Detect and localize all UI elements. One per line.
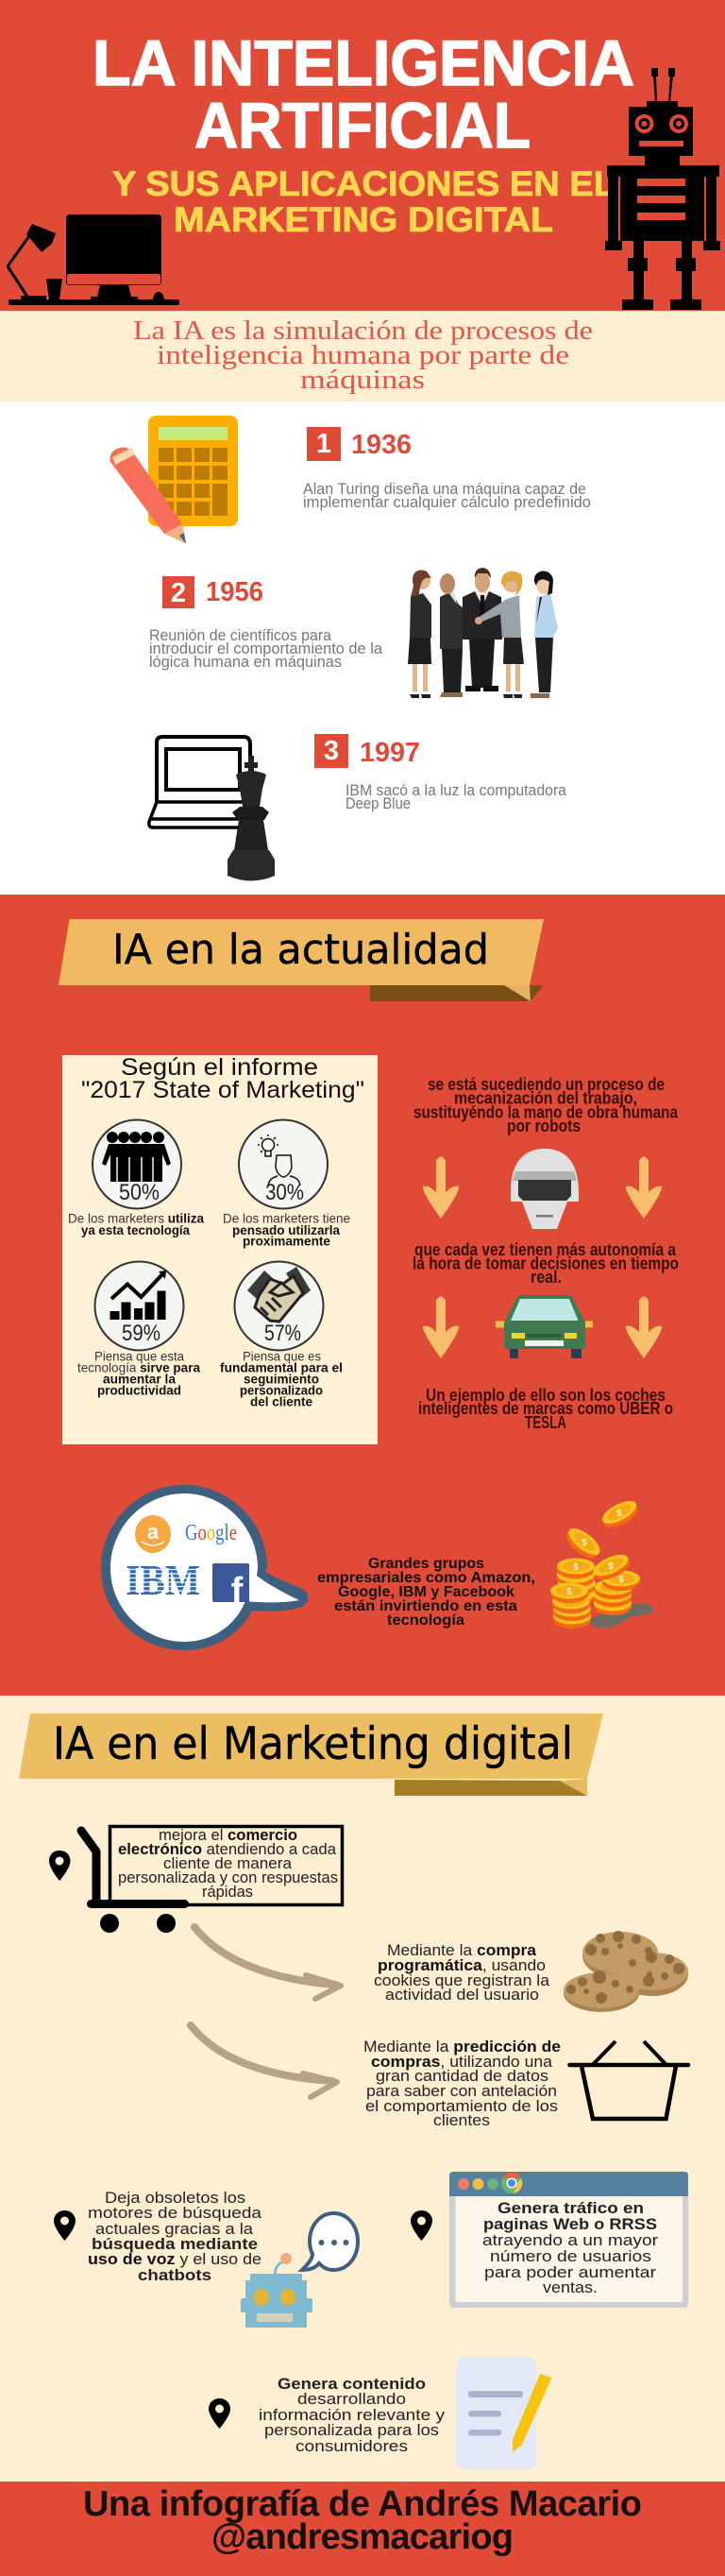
text: genera contenido: consumidores <box>295 2437 408 2455</box>
caption: 30% <box>223 1211 350 1249</box>
icon: gold coins: $ <box>573 1562 579 1573</box>
caption: 57%: personalizado <box>240 1383 323 1398</box>
text: tráfico: Genera tráfico en <box>497 2199 644 2217</box>
definition panel: inteligencia humana por parte de <box>157 341 569 370</box>
stat: 57% <box>234 1262 323 1351</box>
text: búsqueda por voz <box>88 2189 262 2284</box>
arrow: curved to basket <box>191 2025 337 2097</box>
text: predicción de compras: compras, utilizando una <box>371 2053 553 2071</box>
text: búsqueda por voz: búsqueda mediante <box>92 2235 258 2253</box>
caption: 50%: ya esta tecnología <box>81 1222 190 1237</box>
icon: location pin 2 <box>54 2210 76 2241</box>
icon: chatbot robot <box>241 2253 312 2328</box>
icon: chat bubble <box>302 2213 358 2270</box>
text: grandes grupos: Grandes grupos <box>368 1556 484 1572</box>
step 1 <box>303 427 591 511</box>
caption: 59%: aumentar la <box>103 1372 176 1387</box>
icon: gold coins: $ <box>616 1509 622 1519</box>
definition panel <box>0 311 725 401</box>
text: tráfico: ventas. <box>543 2278 598 2296</box>
text: búsqueda por voz: motores de búsqueda <box>88 2204 262 2222</box>
panel: State of Marketing report <box>62 1054 378 1444</box>
icon: laptop and chess king <box>149 737 275 880</box>
text: predicción de compras: el comportamiento de los <box>365 2097 558 2115</box>
icon: shopping basket <box>570 2041 688 2119</box>
stat: 50% <box>93 1120 181 1209</box>
browser window <box>449 2172 688 2308</box>
text: grandes grupos: Google, IBM y Facebook <box>338 1584 514 1600</box>
panel: IA en el Marketing digital <box>0 1696 725 2482</box>
text: mecanización: mecanización del trabajo, <box>454 1088 637 1107</box>
caption: 59%: tecnología sirve para <box>77 1360 200 1375</box>
text: coches inteligentes: TESLA <box>525 1413 566 1432</box>
speech bubble with company logos <box>101 1485 308 1650</box>
text: compra programática: Mediante la compra <box>387 1941 537 1959</box>
step 1: implementar cualquier cálculo predefinido <box>303 493 591 511</box>
text: coches inteligentes <box>418 1386 673 1432</box>
footer: Una infografía de Andrés Macario <box>83 2484 642 2524</box>
panel: IA en la actualidad <box>0 895 725 1696</box>
text: predicción de compras: Mediante la predicción de <box>363 2038 561 2056</box>
text: comercio electrónico: cliente de manera <box>163 1854 293 1872</box>
icon: gold coins: $ <box>608 1561 614 1572</box>
logo: Amazon <box>135 1515 171 1553</box>
text: compra programática: programática, usando <box>378 1956 546 1974</box>
text: genera contenido: personalizada para los <box>264 2421 439 2439</box>
text: grandes grupos: tecnología <box>387 1612 464 1629</box>
text: mecanización: sustituyéndo la mano de obra humana <box>413 1103 679 1122</box>
icon: cookies <box>564 1931 688 2012</box>
text: búsqueda por voz: actuales gracias a la <box>95 2220 254 2238</box>
text: mecanización: se está sucediendo un proceso de <box>428 1075 665 1094</box>
text: grandes grupos <box>317 1556 535 1629</box>
title: ARTIFICIAL <box>194 90 531 162</box>
footer: @andresmacariog <box>211 2517 514 2557</box>
arrow: down right 2 <box>626 1296 662 1358</box>
step 1: 1936 <box>351 430 412 460</box>
caption: 50%: De los marketers utiliza <box>68 1211 204 1226</box>
stat: 50%: 50% <box>119 1180 160 1205</box>
text: comercio electrónico: electrónico atendiendo a cada <box>118 1840 337 1858</box>
stat: 59%: 59% <box>122 1321 160 1346</box>
stat: 59% <box>94 1262 183 1351</box>
icon: shopping cart with text <box>81 1826 342 1933</box>
report heading <box>81 1054 364 1103</box>
step 1: Alan Turing diseña una máquina capaz de <box>303 480 586 498</box>
text: predicción de compras <box>363 2038 561 2129</box>
text: autonomía: real. <box>531 1268 562 1287</box>
text: autonomía: la hora de tomar decisiones en tiempo <box>413 1254 679 1273</box>
text: comercio electrónico: mejora el comercio <box>159 1826 297 1844</box>
title <box>93 27 634 162</box>
text: búsqueda por voz: chatbots <box>138 2266 211 2284</box>
report heading: "2017 State of Marketing" <box>81 1077 364 1103</box>
icon: gold coins <box>550 1496 653 1629</box>
step 2: 1956 <box>206 577 263 607</box>
text: mecanización: por robots <box>507 1117 581 1135</box>
definition panel: La IA es la simulación de procesos de <box>133 316 593 346</box>
text: comercio electrónico: rápidas <box>202 1883 253 1901</box>
icon: gold coins: $ <box>566 1587 572 1597</box>
footer <box>0 2482 725 2576</box>
logo: Google: Google <box>185 1521 237 1545</box>
text: tráfico: atrayendo a un mayor <box>482 2231 658 2249</box>
arrow: down right 1 <box>626 1156 662 1219</box>
text: comercio electrónico <box>118 1826 338 1901</box>
icon: location pin 4 <box>209 2398 230 2429</box>
icon: robot <box>605 68 720 310</box>
caption: 57%: fundamental para el <box>220 1360 343 1375</box>
icon: robot helmet <box>511 1149 579 1229</box>
text: predicción de compras: para saber con antelación <box>366 2082 557 2100</box>
caption: 30%: proximamente <box>243 1234 330 1249</box>
subtitle <box>112 164 615 239</box>
caption: 30%: pensado utilizarla <box>232 1222 340 1237</box>
caption: 57%: Piensa que es <box>243 1349 321 1364</box>
text: autonomía <box>413 1240 679 1287</box>
text: coches inteligentes: Un ejemplo de ello son los coches <box>426 1386 666 1405</box>
icon: location pin 3 <box>411 2210 432 2241</box>
text: compra programática: cookies que registran la <box>374 1971 550 1989</box>
text: búsqueda por voz: uso de voz y el uso de <box>88 2250 261 2268</box>
step 2: lógica humana en máquinas <box>149 653 342 671</box>
text: genera contenido: Genera contenido <box>278 2375 426 2393</box>
caption: 50% <box>68 1211 204 1237</box>
text: genera contenido: información relevante y <box>259 2406 446 2424</box>
text: tráfico <box>482 2199 658 2296</box>
text: tráfico: paginas Web o RRSS <box>483 2215 657 2233</box>
caption: 59%: Piensa que esta <box>94 1349 184 1364</box>
caption: 59%: productividad <box>97 1383 181 1398</box>
logo: IBM: IBM <box>126 1556 200 1604</box>
logo: Facebook: f <box>231 1571 244 1611</box>
step 2 <box>149 576 383 671</box>
text: predicción de compras: gran cantidad de datos <box>376 2067 548 2085</box>
caption: 57%: del cliente <box>250 1394 312 1409</box>
text: compra programática <box>374 1941 550 2004</box>
caption: 59% <box>77 1349 200 1398</box>
text: tráfico: para poder aumentar <box>484 2263 656 2281</box>
text: predicción de compras: clientes <box>433 2111 490 2129</box>
step 3: Deep Blue <box>346 794 411 812</box>
report heading: Según el informe <box>121 1054 318 1081</box>
text: comercio electrónico: personalizada y con respuestas <box>118 1868 338 1886</box>
step 3 <box>314 734 566 812</box>
subtitle: Y SUS APLICACIONES EN EL <box>112 164 615 203</box>
logo: Facebook <box>212 1563 249 1611</box>
stat: 57%: 57% <box>264 1321 301 1346</box>
arrow: down left 1 <box>423 1156 459 1219</box>
panel: timeline <box>0 401 725 895</box>
caption: 57% <box>220 1349 343 1409</box>
text: mecanización <box>413 1075 679 1135</box>
arrow: down left 2 <box>423 1296 459 1358</box>
icon: Chrome logo <box>501 2173 522 2193</box>
text: genera contenido: desarrollando <box>297 2390 406 2408</box>
icon: calculator and pencil <box>110 416 238 544</box>
caption: 30%: De los marketers tiene <box>223 1211 350 1226</box>
step 3: IBM sacó a la luz la computadora <box>346 781 566 799</box>
text: búsqueda por voz: Deja obsoletos los <box>105 2189 245 2207</box>
title: LA INTELIGENCIA <box>93 27 634 99</box>
text: coches inteligentes: inteligentes de marcas como UBER o <box>418 1399 673 1418</box>
text: compra programática: actividad del usuario <box>385 1986 539 2004</box>
arrow: curved to cookies <box>194 1927 341 1999</box>
step 2: Reunión de científicos para <box>149 626 331 644</box>
banner: IA en el Marketing digital: IA en el Marketing digital <box>53 1718 573 1770</box>
step 2: 2 <box>171 578 186 608</box>
banner: IA en la actualidad: IA en la actualidad <box>112 926 489 974</box>
step 3: 3 <box>324 736 339 766</box>
text: autonomía: que cada vez tienen más autonomía a <box>414 1240 677 1259</box>
icon: gold coins: $ <box>618 1575 624 1585</box>
logo: Amazon: a <box>147 1520 160 1544</box>
icon: document and pencil <box>455 2357 551 2469</box>
stat: 30% <box>239 1120 328 1209</box>
subtitle: MARKETING DIGITAL <box>174 200 553 239</box>
banner: IA en el Marketing digital <box>19 1714 603 1796</box>
step 1: 1 <box>316 429 331 459</box>
text: grandes grupos: empresariales como Amazon, <box>317 1570 535 1586</box>
text: genera contenido <box>259 2375 446 2455</box>
icon: gold coins: $ <box>582 1538 587 1548</box>
banner: IA en la actualidad <box>59 919 544 1001</box>
icon: car <box>496 1295 593 1358</box>
header panel <box>0 0 725 311</box>
icon: location pin 1 <box>49 1851 70 1881</box>
step 3: 1997 <box>360 738 420 768</box>
icon: desk with computer and lamp <box>8 214 179 305</box>
caption: 57%: seguimiento <box>244 1372 319 1387</box>
definition panel: máquinas <box>300 366 425 395</box>
stat: 30%: 30% <box>265 1180 304 1205</box>
text: grandes grupos: están invirtiendo en esta <box>334 1598 517 1614</box>
icon: group of business people <box>408 568 558 698</box>
step 2: introducir el comportamiento de la <box>149 640 383 657</box>
text: tráfico: número de usuarios <box>490 2247 651 2265</box>
